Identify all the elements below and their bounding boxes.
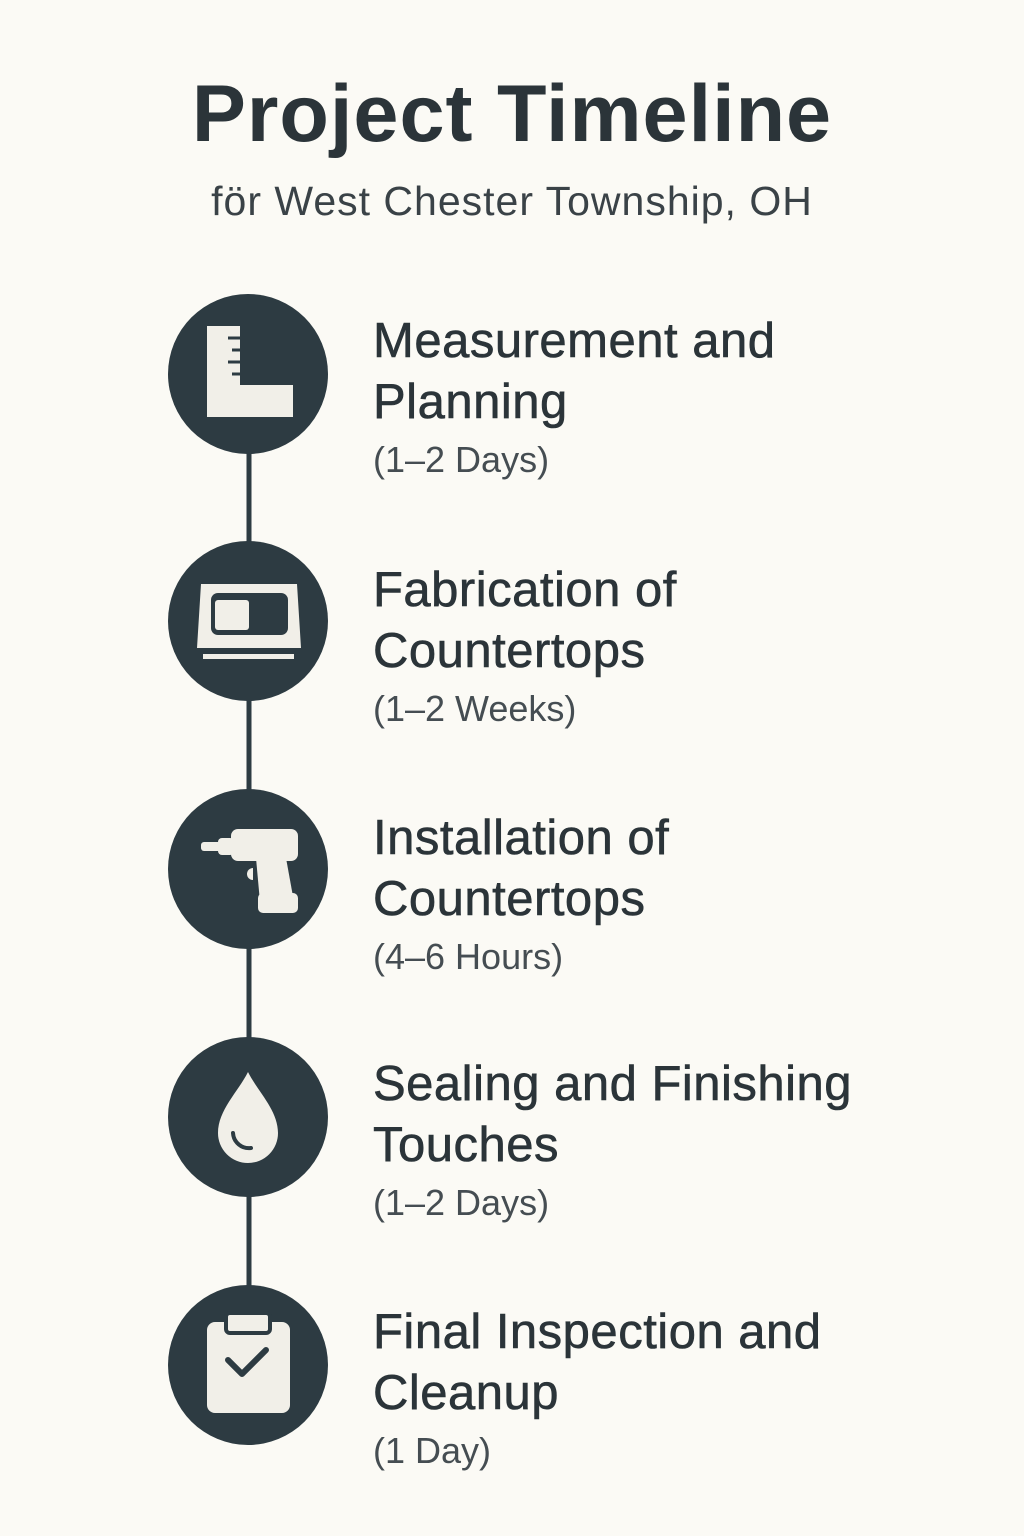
- step 5 text: [373, 1305, 822, 1471]
- title: Project Timeline: [192, 69, 832, 159]
- icon: fabrication machine: [168, 541, 328, 701]
- step 3 text: Installation of: [373, 811, 669, 865]
- step 5 text: (1 Day): [373, 1430, 491, 1471]
- step 4 text: Sealing and Finishing: [373, 1057, 852, 1111]
- icon: ruler square: [168, 294, 328, 454]
- step 1 text: [373, 314, 775, 480]
- step 1 text: Measurement and: [373, 314, 775, 368]
- step 1 text: (1–2 Days): [373, 439, 549, 480]
- icon: drill: [168, 789, 328, 949]
- icon: water drop: [168, 1037, 328, 1197]
- step 2 text: [373, 563, 677, 729]
- step 4 text: (1–2 Days): [373, 1182, 549, 1223]
- step 5 text: Final Inspection and: [373, 1305, 822, 1359]
- icon: clipboard check: [168, 1285, 328, 1445]
- step 4 text: [373, 1057, 852, 1223]
- step 3 text: (4–6 Hours): [373, 936, 563, 977]
- step 1 text: Planning: [373, 375, 568, 429]
- connector lines: [246, 374, 252, 1365]
- subtitle: för West Chester Township, OH: [211, 178, 813, 224]
- step 5 text: Cleanup: [373, 1366, 559, 1420]
- step 3 text: Countertops: [373, 872, 645, 926]
- step 2 text: Fabrication of: [373, 563, 677, 617]
- step 2 text: (1–2 Weeks): [373, 688, 576, 729]
- step 3 text: [373, 811, 670, 977]
- step 2 text: Countertops: [373, 624, 645, 678]
- step 4 text: Touches: [373, 1118, 559, 1172]
